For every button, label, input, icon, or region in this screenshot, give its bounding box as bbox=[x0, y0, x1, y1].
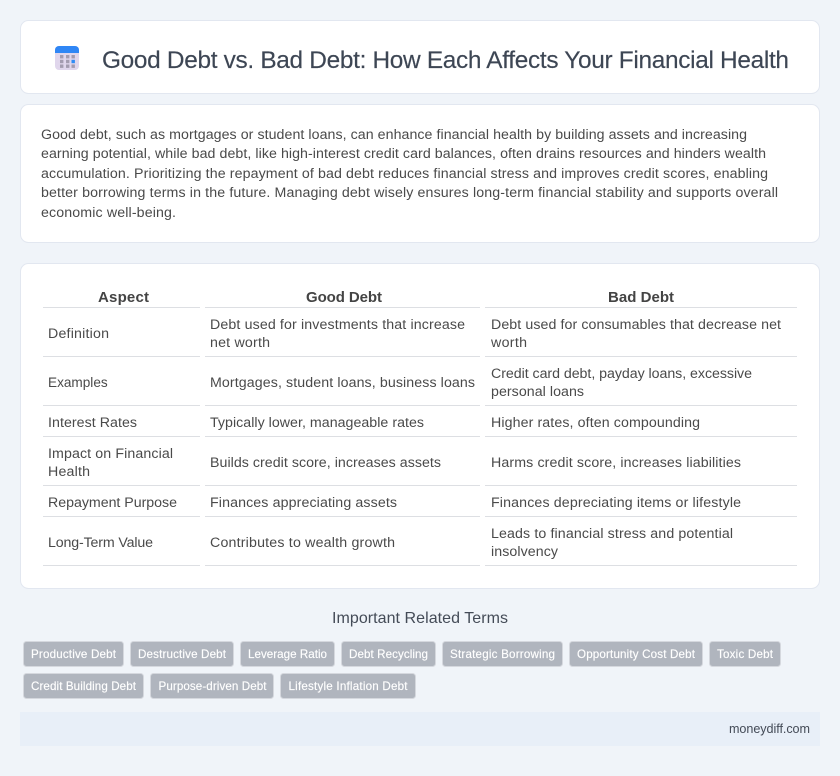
row: impact on financial health: Harms credit score, increases liabilities bbox=[491, 455, 741, 471]
row: long-term value: Long-Term Value bbox=[48, 535, 153, 551]
title: Good Debt vs. Bad Debt: How Each Affects Your Financial Health bbox=[102, 47, 789, 74]
panel: comparison table bbox=[20, 264, 820, 588]
row: definition: net worth bbox=[210, 335, 270, 351]
row: interest rates: Interest Rates bbox=[48, 415, 137, 431]
chip: strategic borrowing: Strategic Borrowing bbox=[450, 648, 555, 661]
text block: summary paragraph: economic well-being. bbox=[41, 205, 176, 221]
footer bar bbox=[20, 712, 820, 746]
row: impact on financial health: Health bbox=[48, 464, 90, 480]
row: long-term value: Contributes to wealth growth bbox=[210, 535, 395, 551]
row: long-term value: insolvency bbox=[491, 544, 559, 560]
row: interest rates: Typically lower, manageable rates bbox=[210, 415, 424, 431]
row: interest rates bbox=[48, 415, 700, 431]
chip: debt recycling bbox=[342, 642, 436, 666]
row: long-term value bbox=[48, 526, 733, 560]
row: definition: Definition bbox=[48, 326, 109, 342]
row: examples: Credit card debt, payday loans, excessive bbox=[491, 366, 752, 382]
row: repayment purpose bbox=[48, 495, 741, 511]
table header row: Aspect bbox=[98, 289, 149, 306]
heading: important related terms: Important Related Terms bbox=[332, 610, 508, 627]
row: definition: Debt used for investments that increase bbox=[210, 317, 465, 333]
row: examples: Mortgages, student loans, business loans bbox=[210, 375, 475, 391]
row: repayment purpose: Repayment Purpose bbox=[48, 495, 177, 511]
panel: introduction text bbox=[20, 104, 820, 242]
text block: summary paragraph: better borrowing terms in the future. Managing debt wisely ensures long-term financial stability and supports overall bbox=[41, 185, 778, 201]
chip: lifestyle inflation debt: Lifestyle Inflation Debt bbox=[288, 680, 408, 693]
panel: header bbox=[20, 20, 820, 94]
row: impact on financial health: Builds credit score, increases assets bbox=[210, 455, 441, 471]
chip: productive debt bbox=[24, 642, 124, 666]
row: examples: Examples bbox=[48, 375, 108, 390]
row: definition: Debt used for consumables that decrease net bbox=[491, 317, 781, 333]
chip: credit building debt bbox=[24, 674, 144, 698]
row: definition: worth bbox=[490, 335, 527, 351]
row: definition bbox=[48, 317, 781, 351]
chip: purpose-driven debt bbox=[150, 674, 274, 698]
chip: leverage ratio: Leverage Ratio bbox=[248, 648, 327, 661]
table header row bbox=[98, 289, 674, 306]
table header row: Bad Debt bbox=[608, 289, 674, 306]
row: examples bbox=[48, 366, 752, 400]
row: repayment purpose: Finances depreciating items or lifestyle bbox=[491, 495, 741, 511]
text block: summary paragraph bbox=[41, 127, 778, 221]
row: examples: personal loans bbox=[491, 384, 584, 400]
chip: productive debt: Productive Debt bbox=[31, 648, 117, 661]
chip: opportunity cost debt: Opportunity Cost Debt bbox=[577, 648, 696, 661]
chip: debt recycling: Debt Recycling bbox=[349, 648, 428, 661]
chip: opportunity cost debt bbox=[570, 642, 702, 666]
related term chips bbox=[24, 642, 780, 698]
text block: summary paragraph: accumulation. Prioritizing the repayment of bad debt reduces financial stress and improves credit scores, enabling bbox=[41, 166, 768, 182]
text block: summary paragraph: Good debt, such as mortgages or student loans, can enhance financial health by building assets and increasing bbox=[41, 127, 747, 143]
chip: toxic debt: Toxic Debt bbox=[717, 648, 774, 661]
chip: purpose-driven debt: Purpose-driven Debt bbox=[158, 680, 267, 693]
chip: destructive debt: Destructive Debt bbox=[138, 648, 227, 661]
chip: leverage ratio bbox=[240, 642, 334, 666]
icon: calendar bbox=[55, 46, 79, 70]
text block: summary paragraph: earning potential, while bad debt, like high-interest credit card balances, often drains resources and hinders wealth bbox=[41, 146, 766, 162]
chip: credit building debt: Credit Building Debt bbox=[31, 680, 137, 693]
row: impact on financial health: Impact on Financial bbox=[48, 446, 173, 462]
row: interest rates: Higher rates, often compounding bbox=[491, 415, 700, 431]
table header row: Good Debt bbox=[306, 289, 382, 306]
row: impact on financial health bbox=[48, 446, 741, 480]
chip: strategic borrowing bbox=[442, 642, 562, 666]
chip: destructive debt bbox=[130, 642, 234, 666]
chip: toxic debt bbox=[710, 642, 780, 666]
chip: lifestyle inflation debt bbox=[280, 674, 416, 698]
footer source text: moneydiff.com bbox=[729, 722, 810, 736]
row: long-term value: Leads to financial stress and potential bbox=[491, 526, 733, 542]
row: repayment purpose: Finances appreciating assets bbox=[210, 495, 397, 511]
